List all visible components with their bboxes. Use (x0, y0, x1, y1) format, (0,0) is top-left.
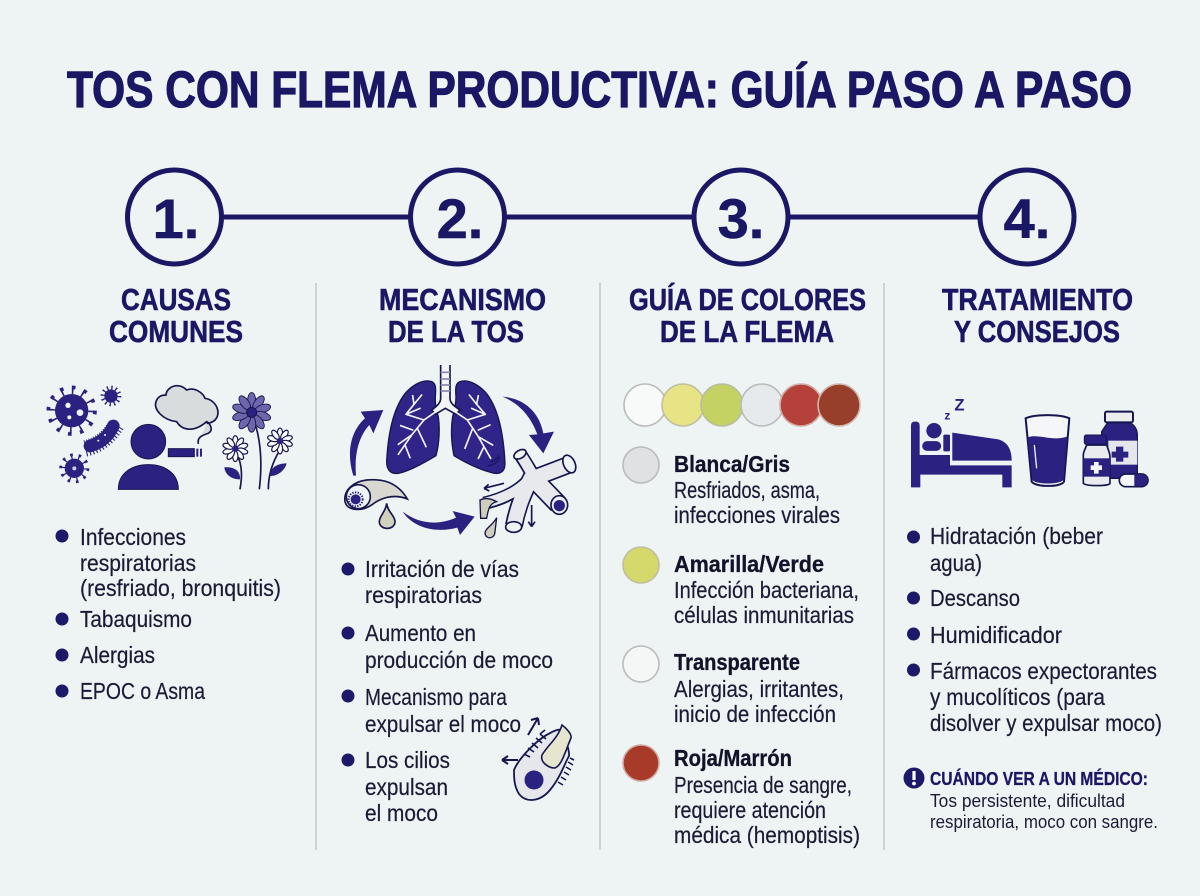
color: transparente: Transparente (674, 649, 800, 675)
bullet list: mechanism (342, 556, 553, 826)
step 4 badge (980, 170, 1074, 264)
smoke (156, 386, 218, 444)
step 3 badge (694, 170, 788, 264)
step timeline (128, 170, 1074, 264)
heading: causas comunes (109, 282, 243, 349)
color: transparente (623, 646, 844, 727)
bullet list: treatment: disolver y expulsar moco) (930, 710, 1162, 736)
heading: mecanismo: MECANISMO (379, 282, 546, 317)
bullet list: treatment: agua) (930, 550, 982, 576)
bullet list: treatment: Descanso (930, 585, 1020, 611)
bullet list: causes: Alergias (80, 642, 155, 668)
color: blanca/gris: infecciones virales (674, 502, 840, 528)
step 1 badge: 1. (153, 187, 199, 250)
color: blanca/gris (623, 447, 840, 528)
step 4 badge: 4. (1004, 187, 1050, 250)
bed (911, 396, 1012, 487)
phlegm color samples (624, 384, 860, 426)
bullet list: causes: EPOC o Asma (80, 678, 205, 704)
bullet list: mechanism: expulsan (365, 774, 448, 800)
bed: z (944, 408, 950, 422)
color: roja/marrón: Roja/Marrón (674, 745, 792, 771)
bullet list: mechanism: Aumento en (365, 620, 476, 646)
icon: warning (904, 768, 924, 788)
color: amarilla/verde (623, 547, 859, 628)
bullet list: causes: Infecciones (80, 524, 186, 550)
icon: viruses, smoker and flowers (48, 386, 293, 489)
color: roja/marrón: Presencia de sangre, (674, 772, 852, 798)
heading: mecanismo: DE LA TOS (388, 314, 524, 349)
bullet list: causes: (resfriado, bronquitis) (80, 575, 281, 601)
step 2 badge: 2. (437, 187, 483, 250)
step 3 badge: 3. (718, 187, 764, 250)
bullet list: causes (56, 524, 281, 704)
icon: lungs and cough cycle (345, 365, 578, 538)
callout: cuándo ver a un médico: Tos persistente, dificultad (930, 791, 1125, 811)
heading: tratamiento (942, 282, 1133, 349)
water glass (1026, 415, 1069, 486)
cycle arrows (350, 397, 554, 535)
color: blanca/gris: Blanca/Gris (674, 451, 790, 477)
color: amarilla/verde: células inmunitarias (674, 602, 854, 628)
bullet list: mechanism: Los cilios (365, 747, 450, 773)
lungs (387, 381, 439, 473)
bullet list: causes: Tabaquismo (80, 606, 192, 632)
irritated airway (345, 480, 407, 509)
color: amarilla/verde: Amarilla/Verde (674, 551, 824, 577)
bullet list: mechanism: expulsar el moco (365, 711, 521, 737)
bullet list: mechanism: producción de moco (365, 647, 553, 673)
medicines (1102, 422, 1137, 478)
bullet list: mechanism: respiratorias (365, 582, 482, 608)
heading: guía de colores: DE LA FLEMA (660, 314, 834, 349)
heading: causas comunes: COMUNES (109, 314, 243, 349)
bullet list: treatment: Humidificador (930, 622, 1062, 648)
panel: mecanismo de la tos (342, 282, 578, 826)
bullet list: mechanism: Irritación de vías (365, 556, 519, 582)
heading: guía de colores: GUÍA DE COLORES (629, 282, 866, 317)
callout: cuándo ver a un médico: respiratoria, moco con sangre. (930, 812, 1158, 832)
panel: guía de colores (623, 282, 866, 848)
bed: Z (954, 396, 965, 415)
step 2 badge (410, 170, 504, 264)
color: roja/marrón (623, 745, 860, 848)
bullet list: treatment (907, 523, 1162, 736)
color: amarilla/verde: Infección bacteriana, (674, 577, 859, 603)
bullet list: treatment: y mucolíticos (para (930, 684, 1105, 710)
panel: tratamiento y consejos (904, 282, 1162, 832)
heading: causas comunes: CAUSAS (121, 282, 231, 317)
color: transparente: Alergias, irritantes, (674, 676, 844, 702)
panel: causas comunes (48, 282, 293, 704)
heading: tratamiento: TRATAMIENTO (942, 282, 1133, 317)
heading: mecanismo (379, 282, 546, 349)
bullet list: mechanism: el moco (365, 800, 438, 826)
trachea (432, 365, 460, 414)
color: roja/marrón: médica (hemoptisis) (674, 822, 860, 848)
icon: bed, water glass and medicines (911, 396, 1148, 487)
color: transparente: inicio de infección (674, 701, 836, 727)
bullet list: causes: respiratorias (80, 550, 196, 576)
callout: cuándo ver a un médico (904, 768, 1158, 832)
bullet list: treatment: Fármacos expectorantes (930, 658, 1157, 684)
bullet list: treatment: Hidratación (beber (930, 523, 1103, 549)
color: blanca/gris: Resfriados, asma, (674, 477, 820, 503)
flowers (237, 427, 280, 489)
step 1 badge (128, 170, 222, 264)
bullet list: mechanism: Mecanismo para (365, 684, 507, 710)
callout: cuándo ver a un médico: CUÁNDO VER A UN MÉDICO: (930, 768, 1148, 789)
icon: ciliated cell (502, 718, 574, 800)
heading: tratamiento: Y CONSEJOS (954, 314, 1120, 349)
color: roja/marrón: requiere atención (674, 797, 826, 823)
bronchial tree (484, 455, 568, 526)
heading: guía de colores (629, 282, 866, 349)
